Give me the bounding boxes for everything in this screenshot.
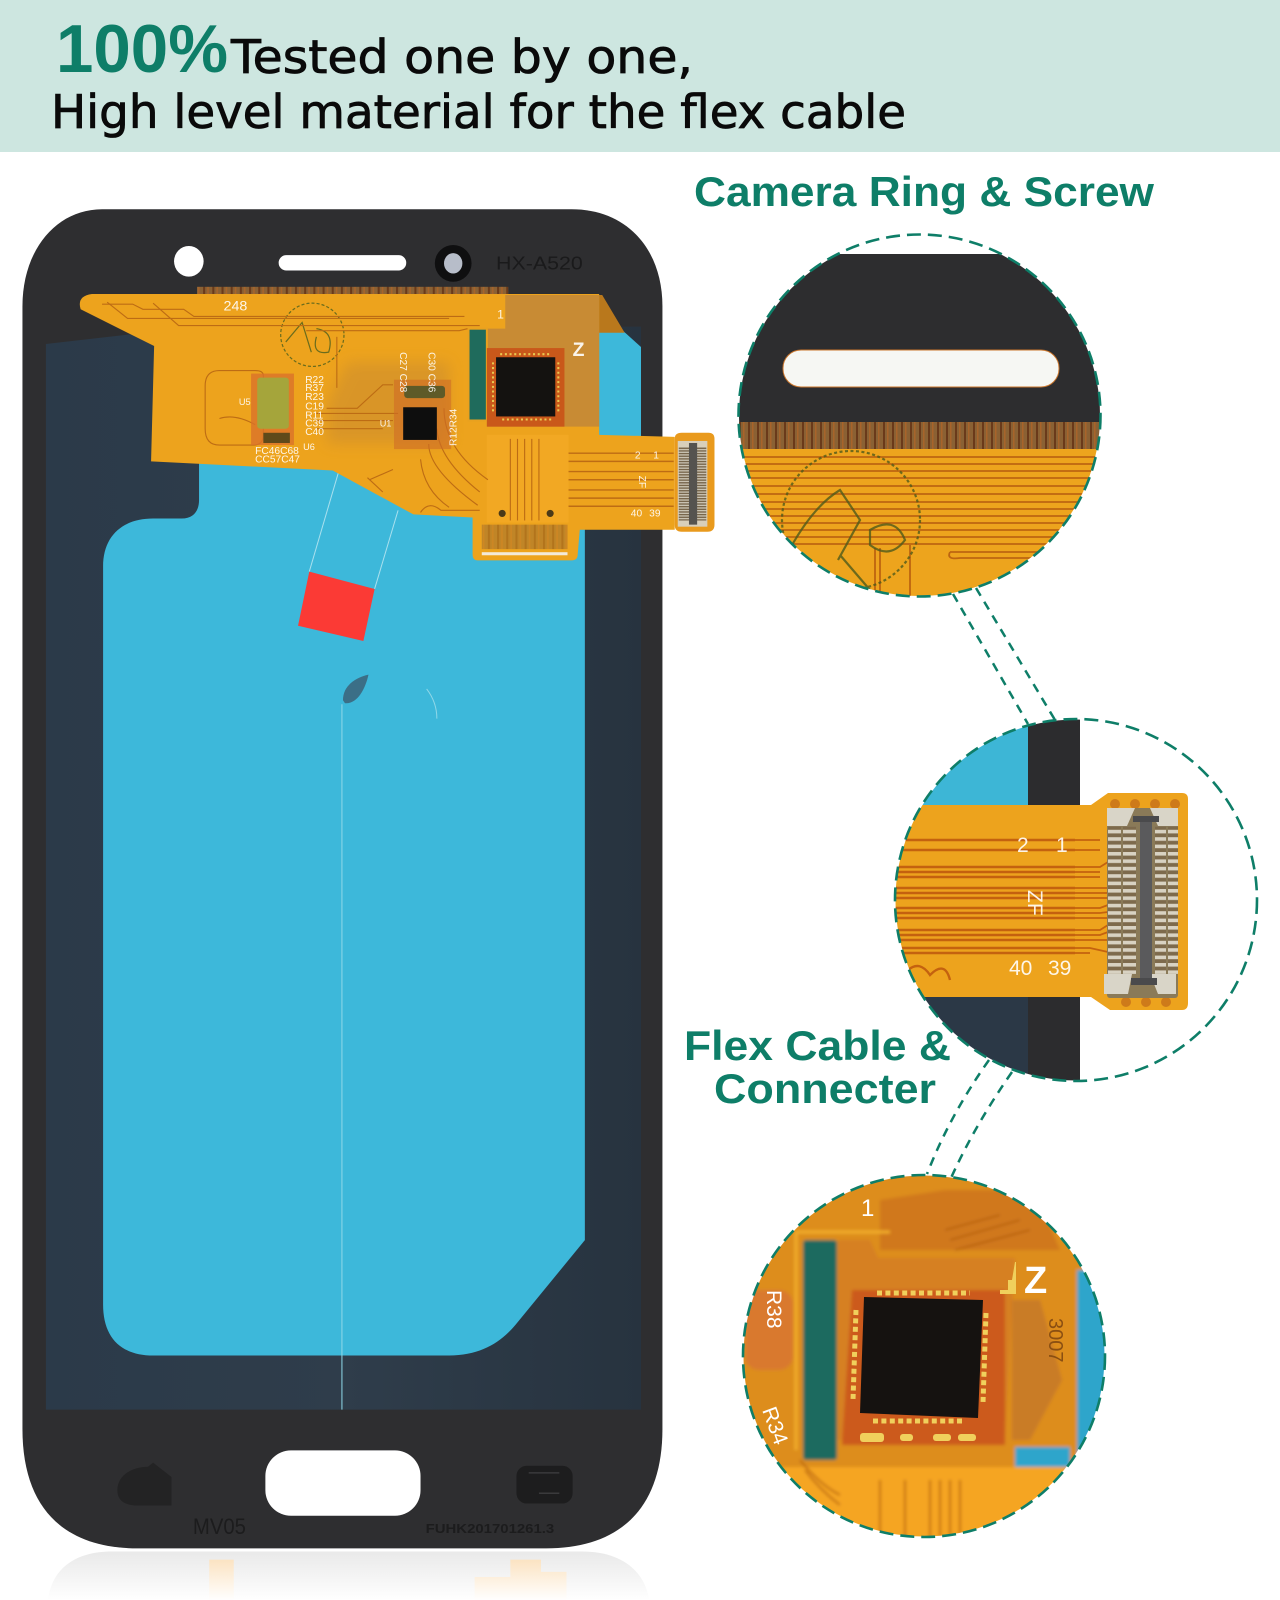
sensor hole (174, 246, 204, 277)
headline: second line: High level material for the flex cable (51, 85, 906, 139)
magnified image (896, 720, 1080, 1080)
green component (251, 374, 294, 445)
model label: HX-A520 (496, 252, 583, 273)
pull tab lines (309, 467, 398, 589)
reflection below phone (48, 1551, 649, 1600)
connector socket (1104, 808, 1178, 998)
board labels: FC46C68 (255, 446, 299, 457)
translucent chip carrier (487, 295, 599, 427)
connector pins (678, 441, 707, 527)
magnified image: Z (1024, 1260, 1047, 1302)
magnified image: 3007 (1044, 1318, 1066, 1362)
film seam (342, 689, 437, 1410)
dashed ring (743, 1175, 1105, 1537)
board labels: Z (573, 339, 585, 361)
connector pads (1110, 799, 1180, 1007)
red pull tab (298, 572, 375, 641)
heading: flex cable and connecter (684, 1022, 951, 1112)
IC pads (493, 354, 558, 420)
magnified image: 1 (861, 1195, 874, 1222)
board labels: C27 C28 (397, 352, 408, 393)
dashed ring (738, 234, 1100, 596)
board labels: R37 (305, 383, 324, 394)
board labels: R12R34 (448, 408, 459, 446)
flex labels: 1 (1056, 834, 1068, 857)
protective film (46, 327, 641, 1410)
flex labels: ZF (1023, 890, 1046, 916)
earpiece slot (279, 255, 406, 270)
board labels: U6 (303, 442, 315, 452)
flex labels: 2 (1017, 834, 1029, 857)
board labels: 40 (631, 508, 642, 519)
heading: flex cable and connecter: Connecter (714, 1065, 936, 1112)
board labels: U5 (239, 397, 251, 407)
magnified image: R38 (762, 1290, 785, 1329)
board labels: 1 (653, 450, 659, 461)
board labels: C40 (305, 427, 324, 438)
magnified image: R34 (757, 1404, 792, 1448)
flex labels: 40 (1009, 957, 1032, 980)
blue adhesive panel (103, 449, 585, 1355)
connector board (1075, 793, 1188, 1010)
board labels: 248 (224, 298, 247, 314)
heading: flex cable and connecter: Flex Cable & (684, 1022, 951, 1069)
back key icon (117, 1463, 171, 1506)
headline: 100%: 100% (56, 11, 228, 87)
home button cutout (265, 1450, 421, 1516)
print code left: MV05 (193, 1514, 246, 1539)
flex traces to connector (1075, 840, 1108, 953)
stripe band (197, 287, 508, 296)
heading: camera ring and screw: Camera Ring & Screw (694, 168, 1154, 215)
board labels (224, 298, 661, 519)
magnified image (744, 1176, 1104, 1536)
cross arm highlight (487, 435, 569, 523)
board labels: 1 (497, 307, 504, 321)
connector board (675, 433, 714, 532)
main flex cable (80, 294, 675, 560)
board labels: C39 (305, 419, 324, 430)
chip halo: main IC (487, 348, 564, 427)
board labels: R22 (305, 375, 324, 386)
board labels: U1 (380, 419, 391, 429)
phone LCD screen assembly (22, 209, 714, 1548)
board labels: R23 (305, 392, 324, 403)
board labels: CC57C47 (255, 454, 300, 465)
flex labels (1009, 834, 1071, 980)
header band (0, 0, 1280, 152)
board labels: ZF (636, 476, 647, 488)
sensor chip (394, 380, 451, 449)
film blemish (343, 675, 368, 703)
recents key icon (516, 1466, 573, 1503)
dashed ring (895, 719, 1257, 1081)
magnifier: earpiece and flex top (730, 234, 1110, 600)
connector lines between upper circles (953, 588, 1055, 724)
green window strip (469, 329, 487, 421)
flex shading (327, 362, 449, 444)
board labels: 2 (635, 450, 641, 461)
board labels: C30 C36 (426, 352, 437, 393)
magnified image (730, 254, 1110, 600)
stamp mark (281, 303, 344, 366)
print code right: FUHK201701261.3 (426, 1521, 554, 1536)
copper traces (102, 302, 674, 521)
wedge behind flex (592, 295, 625, 333)
board labels: R11 (305, 410, 323, 421)
magnifier: main IC chip (742, 1174, 1106, 1538)
flex labels: 39 (1048, 957, 1071, 980)
black frame (22, 209, 662, 1548)
connector lines between lower circles (927, 1060, 1012, 1178)
board labels: 39 (649, 508, 661, 519)
camera ring (435, 245, 472, 282)
ribbon sub-connector (482, 510, 568, 555)
main IC (496, 357, 555, 416)
board labels: C19 (305, 401, 324, 412)
headline: first line: Tested one by one, (230, 30, 693, 84)
magnifier: flex cable connector (890, 715, 1257, 1085)
